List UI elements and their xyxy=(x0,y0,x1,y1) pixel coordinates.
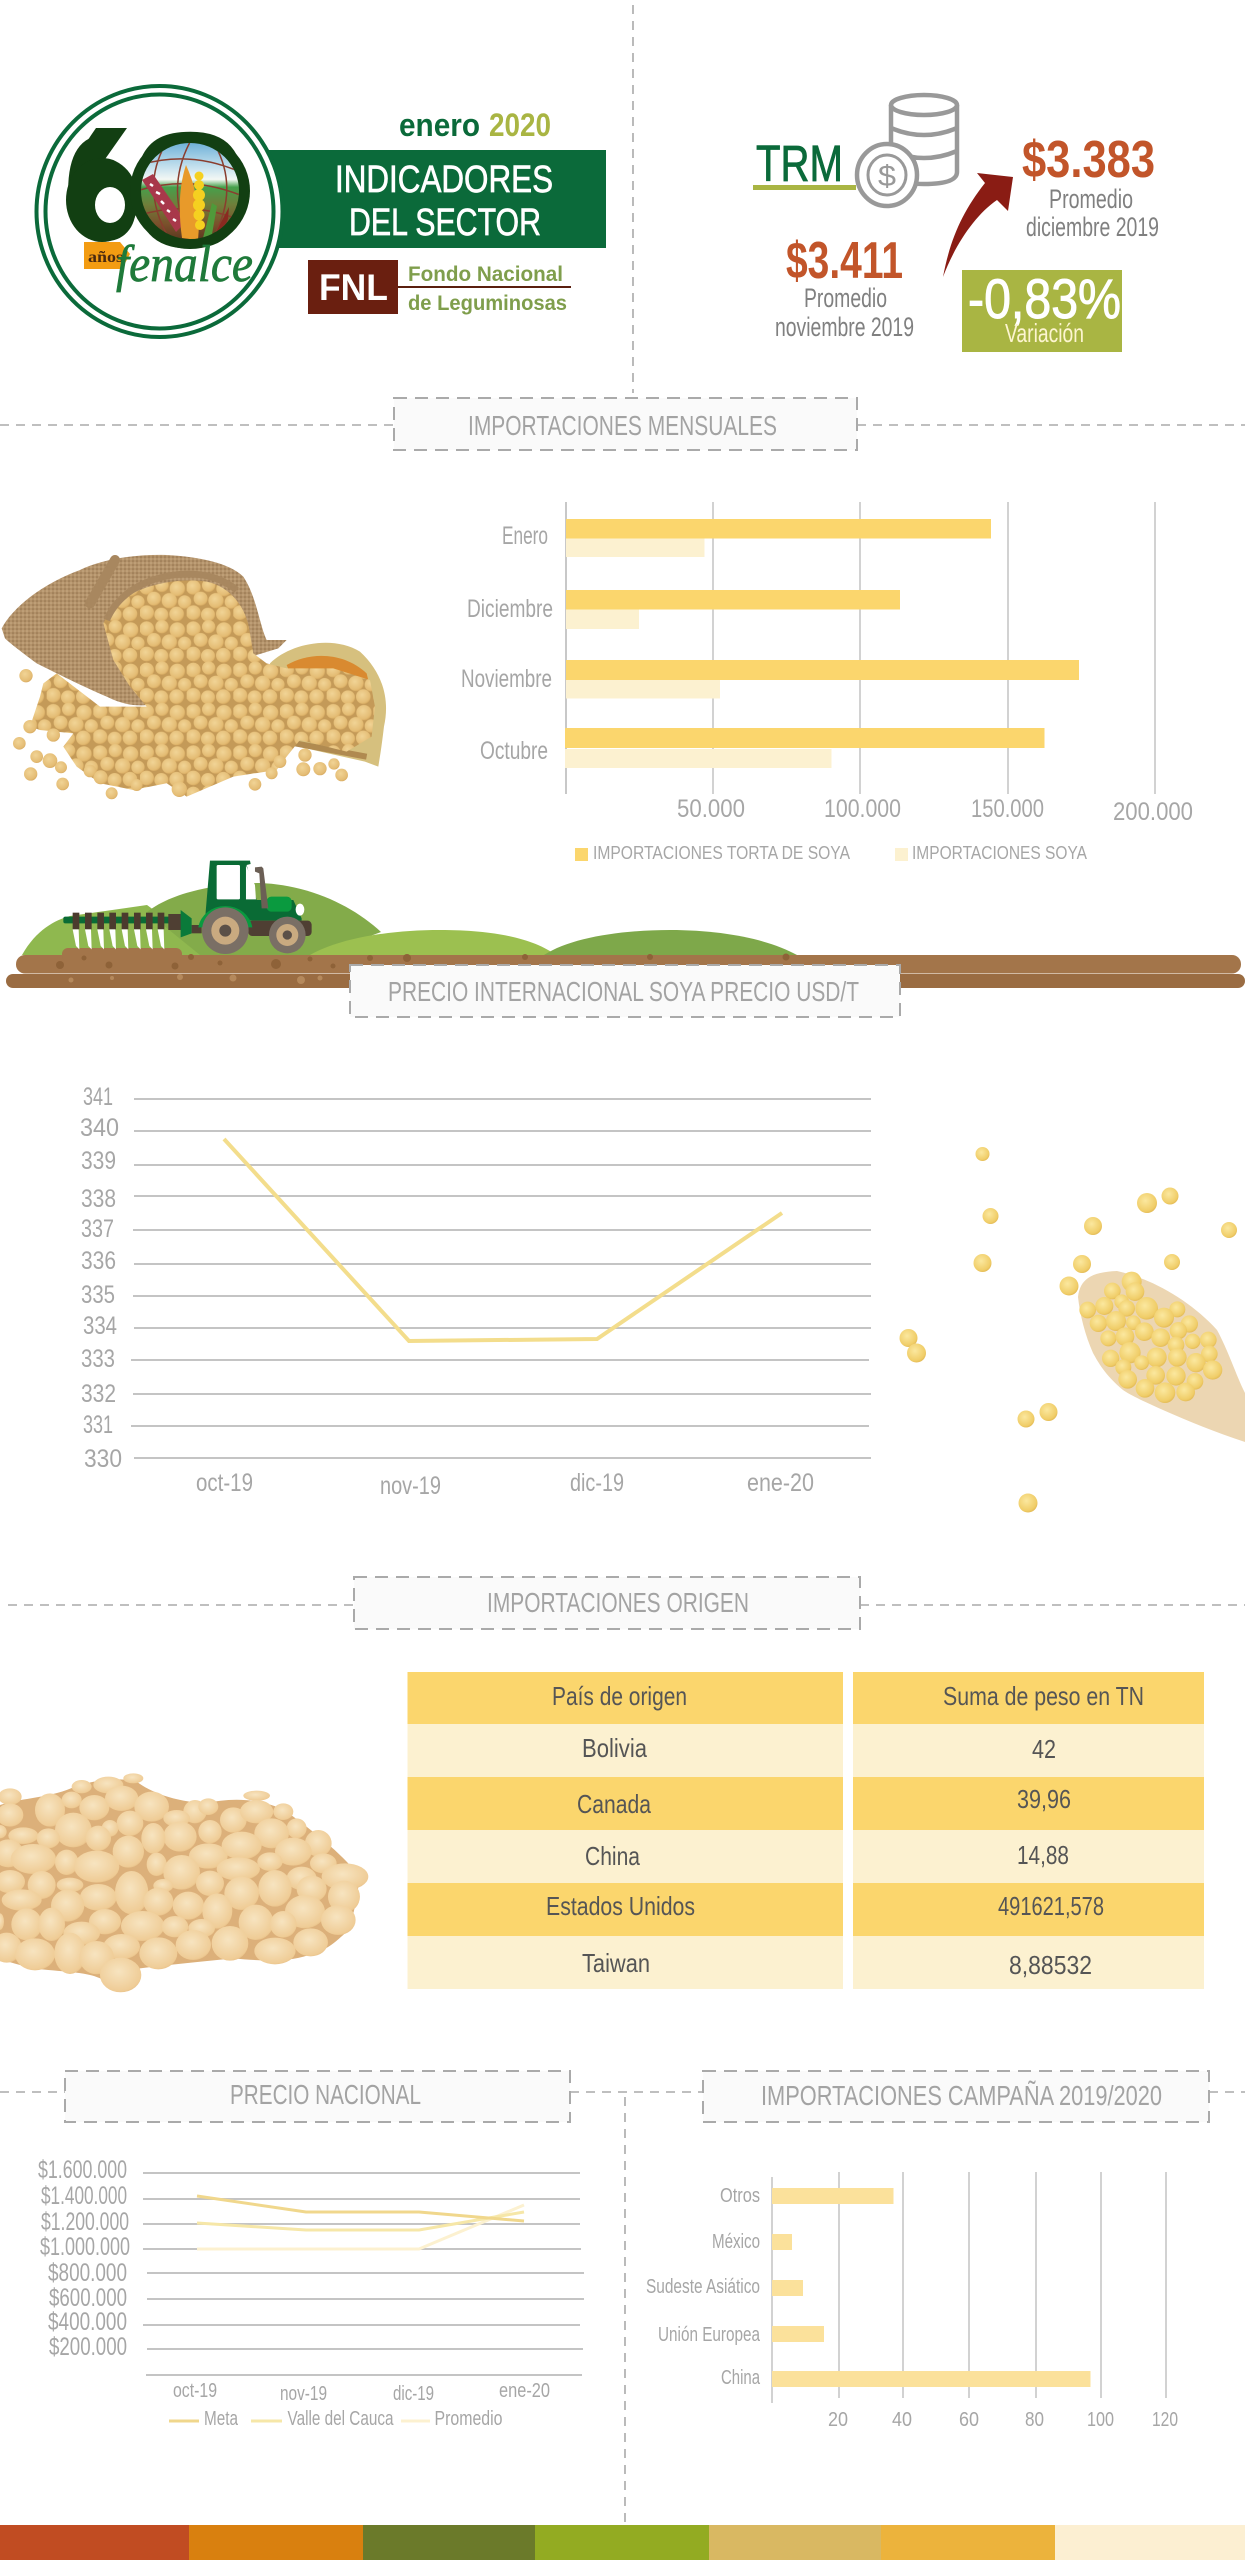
icon: coins: $ xyxy=(878,160,896,193)
x axis labels: ene-20 xyxy=(747,1469,814,1497)
series: meta xyxy=(197,2196,524,2221)
row: China: 14,88 xyxy=(1017,1840,1069,1870)
logo: fondo nacional de leguminosas: de Leguminosas xyxy=(408,292,567,315)
y axis labels: 333 xyxy=(81,1345,115,1373)
heading: precio nacional xyxy=(65,2071,570,2122)
icon: coins xyxy=(857,95,957,206)
legend: Promedio xyxy=(434,2408,502,2430)
y axis labels: 341 xyxy=(83,1083,113,1111)
row: header: Suma de peso en TN xyxy=(943,1681,1144,1711)
value axis labels: 100.000 xyxy=(824,795,901,823)
value: diciembre xyxy=(1022,131,1159,242)
y axis labels: 340 xyxy=(80,1114,119,1142)
bars: enero xyxy=(566,519,991,557)
line chart: precio nacional xyxy=(38,2156,584,2430)
data line xyxy=(224,1139,782,1341)
value axis labels: 150.000 xyxy=(971,795,1044,823)
category labels: Noviembre xyxy=(461,665,552,693)
divider: header vertical xyxy=(632,5,634,393)
value: noviembre: Promedio xyxy=(804,283,887,313)
row: Taiwan xyxy=(408,1936,1204,1989)
arrow: change xyxy=(943,173,1013,277)
x axis labels: ene-20 xyxy=(499,2380,550,2402)
image: scattered soybeans xyxy=(900,1147,1237,1512)
date: enero 2020: enero xyxy=(399,107,480,143)
banner: indicadores del sector: DEL SECTOR xyxy=(349,202,541,244)
y axis labels: $600.000 xyxy=(49,2284,127,2312)
y axis labels xyxy=(80,1083,122,1473)
category labels: Sudeste Asiático xyxy=(646,2276,760,2298)
y axis labels: 338 xyxy=(81,1185,116,1213)
illustration: farm landscape xyxy=(6,861,1245,988)
heading: precio internacional xyxy=(350,965,900,1017)
legend: IMPORTACIONES TORTA DE SOYA xyxy=(593,843,850,863)
row: Estados Unidos: Estados Unidos xyxy=(546,1891,695,1921)
y axis labels: $800.000 xyxy=(48,2259,127,2287)
category labels: Unión Europea xyxy=(658,2324,761,2346)
legend: Valle del Cauca xyxy=(288,2408,394,2430)
y axis labels: 334 xyxy=(83,1312,117,1340)
logo: fenalce 60 años: 6 xyxy=(63,104,141,272)
y axis labels: 332 xyxy=(81,1380,116,1408)
x axis labels: oct-19 xyxy=(196,1469,253,1497)
x axis labels xyxy=(173,2380,550,2405)
footer colour band xyxy=(0,2525,1245,2560)
callout: variation: Variación xyxy=(1005,318,1084,348)
row: Estados Unidos: 491621,578 xyxy=(998,1891,1104,1921)
logo: fenalce 60 años: 0 xyxy=(127,98,253,282)
heading: importaciones mensuales xyxy=(394,398,857,450)
heading: precio nacional: PRECIO NACIONAL xyxy=(230,2079,421,2110)
row: Canada xyxy=(408,1777,1204,1830)
image: wooden spoon with soybeans xyxy=(1078,1271,1245,1442)
x axis labels: dic-19 xyxy=(570,1469,624,1497)
row: Canada: Canada xyxy=(577,1789,651,1819)
divider: section 4 xyxy=(0,2092,1245,2525)
series: valle del cauca xyxy=(197,2212,524,2230)
logo: fondo nacional de leguminosas: FNL xyxy=(319,267,388,308)
category labels: México xyxy=(712,2231,760,2253)
date: enero 2020 xyxy=(399,107,551,143)
x axis labels: oct-19 xyxy=(173,2380,217,2402)
bar chart: importaciones mensuales xyxy=(461,502,1193,863)
x axis labels xyxy=(196,1469,814,1500)
logo: fenalce 60 años: años xyxy=(88,249,123,266)
row: Taiwan: Taiwan xyxy=(582,1948,650,1978)
logo: fondo nacional de leguminosas: Fondo Nacional xyxy=(408,263,563,286)
banner: indicadores del sector: INDICADORES xyxy=(335,159,553,201)
divider: section 3 xyxy=(8,1604,1245,1606)
divider: section 1 xyxy=(0,424,1245,426)
y axis labels: $1.400.000 xyxy=(41,2182,127,2210)
category labels: Otros xyxy=(720,2185,760,2207)
y axis labels: $1.000.000 xyxy=(40,2233,130,2261)
value axis labels: 50.000 xyxy=(677,795,745,823)
y axis labels: 337 xyxy=(81,1215,114,1243)
category labels: Diciembre xyxy=(467,595,553,623)
bar chart: importaciones campaña xyxy=(646,2172,1178,2431)
y axis labels: $1.200.000 xyxy=(41,2208,129,2236)
row: Estados Unidos xyxy=(408,1883,1204,1936)
heading: importaciones origen: IMPORTACIONES ORIGEN xyxy=(487,1587,749,1618)
y axis labels: 335 xyxy=(81,1281,115,1309)
value axis labels xyxy=(828,2409,1178,2431)
value: diciembre: diciembre 2019 xyxy=(1026,212,1159,242)
banner: indicadores del sector xyxy=(261,150,606,248)
x axis labels: nov-19 xyxy=(280,2383,327,2405)
callout: variation xyxy=(962,267,1122,352)
logo: fenalce 60 años xyxy=(36,86,282,337)
image: pile of soybeans xyxy=(0,1773,368,1992)
bars: octubre xyxy=(565,728,1044,768)
row: Bolivia: Bolivia xyxy=(582,1733,647,1763)
bars: noviembre xyxy=(566,660,1079,698)
date: enero 2020: 2020 xyxy=(489,107,551,143)
logo: fenalce 60 años: fenalce xyxy=(116,236,253,293)
row: header: País de origen xyxy=(552,1681,687,1711)
value axis labels: 20 xyxy=(828,2409,848,2431)
category labels xyxy=(461,522,553,765)
line chart: precio internacional xyxy=(80,1083,871,1500)
row: Bolivia: 42 xyxy=(1032,1734,1056,1764)
series: promedio xyxy=(197,2205,524,2249)
value: diciembre: Promedio xyxy=(1049,184,1133,214)
callout: variation: -0,83% xyxy=(968,267,1121,330)
panel: TRM xyxy=(753,95,1159,352)
row: Bolivia xyxy=(408,1724,1204,1777)
category labels: Enero xyxy=(502,522,548,550)
value: noviembre xyxy=(775,232,914,342)
y axis labels: 331 xyxy=(83,1411,113,1439)
value axis labels: 100 xyxy=(1087,2409,1114,2431)
y axis labels: 336 xyxy=(81,1247,116,1275)
heading: importaciones campaña xyxy=(703,2071,1209,2122)
value axis labels: 40 xyxy=(892,2409,912,2431)
row: China: China xyxy=(585,1841,640,1871)
legend: IMPORTACIONES SOYA xyxy=(912,843,1087,863)
row: Canada: 39,96 xyxy=(1017,1784,1071,1814)
category labels: Octubre xyxy=(480,737,548,765)
value axis labels: 60 xyxy=(959,2409,979,2431)
value axis labels xyxy=(677,795,1193,826)
category labels: China xyxy=(721,2367,761,2389)
table: importaciones por origen xyxy=(408,1672,1204,1989)
value axis labels: 80 xyxy=(1025,2409,1044,2431)
y axis labels: 339 xyxy=(81,1147,116,1175)
heading: importaciones origen xyxy=(354,1577,860,1629)
icon: tractor with plow xyxy=(63,861,312,954)
y axis labels xyxy=(38,2156,130,2361)
logo: fondo nacional de leguminosas xyxy=(308,260,571,315)
panel: header logo xyxy=(36,86,606,337)
y axis labels: $400.000 xyxy=(48,2308,127,2336)
value: noviembre: noviembre 2019 xyxy=(775,312,914,342)
row: Taiwan: 8,88532 xyxy=(1009,1950,1092,1980)
bars: diciembre xyxy=(566,590,900,629)
row: China xyxy=(408,1830,1204,1883)
value: diciembre: $3.383 xyxy=(1022,131,1155,189)
x axis labels: nov-19 xyxy=(380,1472,441,1500)
y axis labels: 330 xyxy=(84,1445,122,1473)
category labels xyxy=(646,2185,761,2389)
y axis labels: $200.000 xyxy=(49,2333,127,2361)
value axis labels: 120 xyxy=(1152,2409,1178,2431)
value axis labels: 200.000 xyxy=(1113,798,1193,826)
x axis labels: dic-19 xyxy=(393,2383,434,2405)
y axis labels: $1.600.000 xyxy=(38,2156,127,2184)
heading: precio internacional: PRECIO INTERNACIONAL SOYA PRECIO USD/T xyxy=(388,976,859,1007)
value: noviembre: $3.411 xyxy=(786,232,903,290)
image: sack of soybeans xyxy=(2,555,386,799)
heading: importaciones mensuales: IMPORTACIONES MENSUALES xyxy=(468,410,777,441)
legend xyxy=(575,843,1087,863)
legend: Meta xyxy=(204,2408,239,2430)
row: header xyxy=(408,1672,1204,1724)
TRM label: TRM xyxy=(756,135,843,192)
legend xyxy=(169,2408,502,2430)
bars xyxy=(772,2188,1090,2387)
